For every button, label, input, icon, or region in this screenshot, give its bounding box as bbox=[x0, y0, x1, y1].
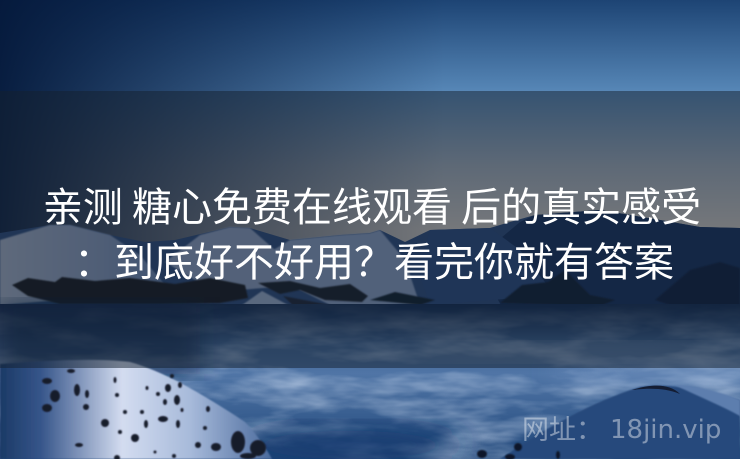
translucent dark overlay band bbox=[0, 91, 740, 368]
watermark url: 网址： bbox=[522, 415, 603, 445]
distant snowy peak at lower right bbox=[477, 385, 740, 459]
title: 亲测 糖心免费在线观看 后的真实感受 bbox=[43, 186, 701, 230]
title: ：到底好不好用？看完你就有答案 bbox=[74, 241, 674, 285]
watermark url: 18jin.vip bbox=[610, 415, 721, 445]
sea of clouds bbox=[0, 304, 740, 459]
watermark url bbox=[522, 415, 721, 445]
snowy foreground hill with trees bbox=[0, 360, 272, 459]
mountain range bbox=[0, 210, 740, 316]
